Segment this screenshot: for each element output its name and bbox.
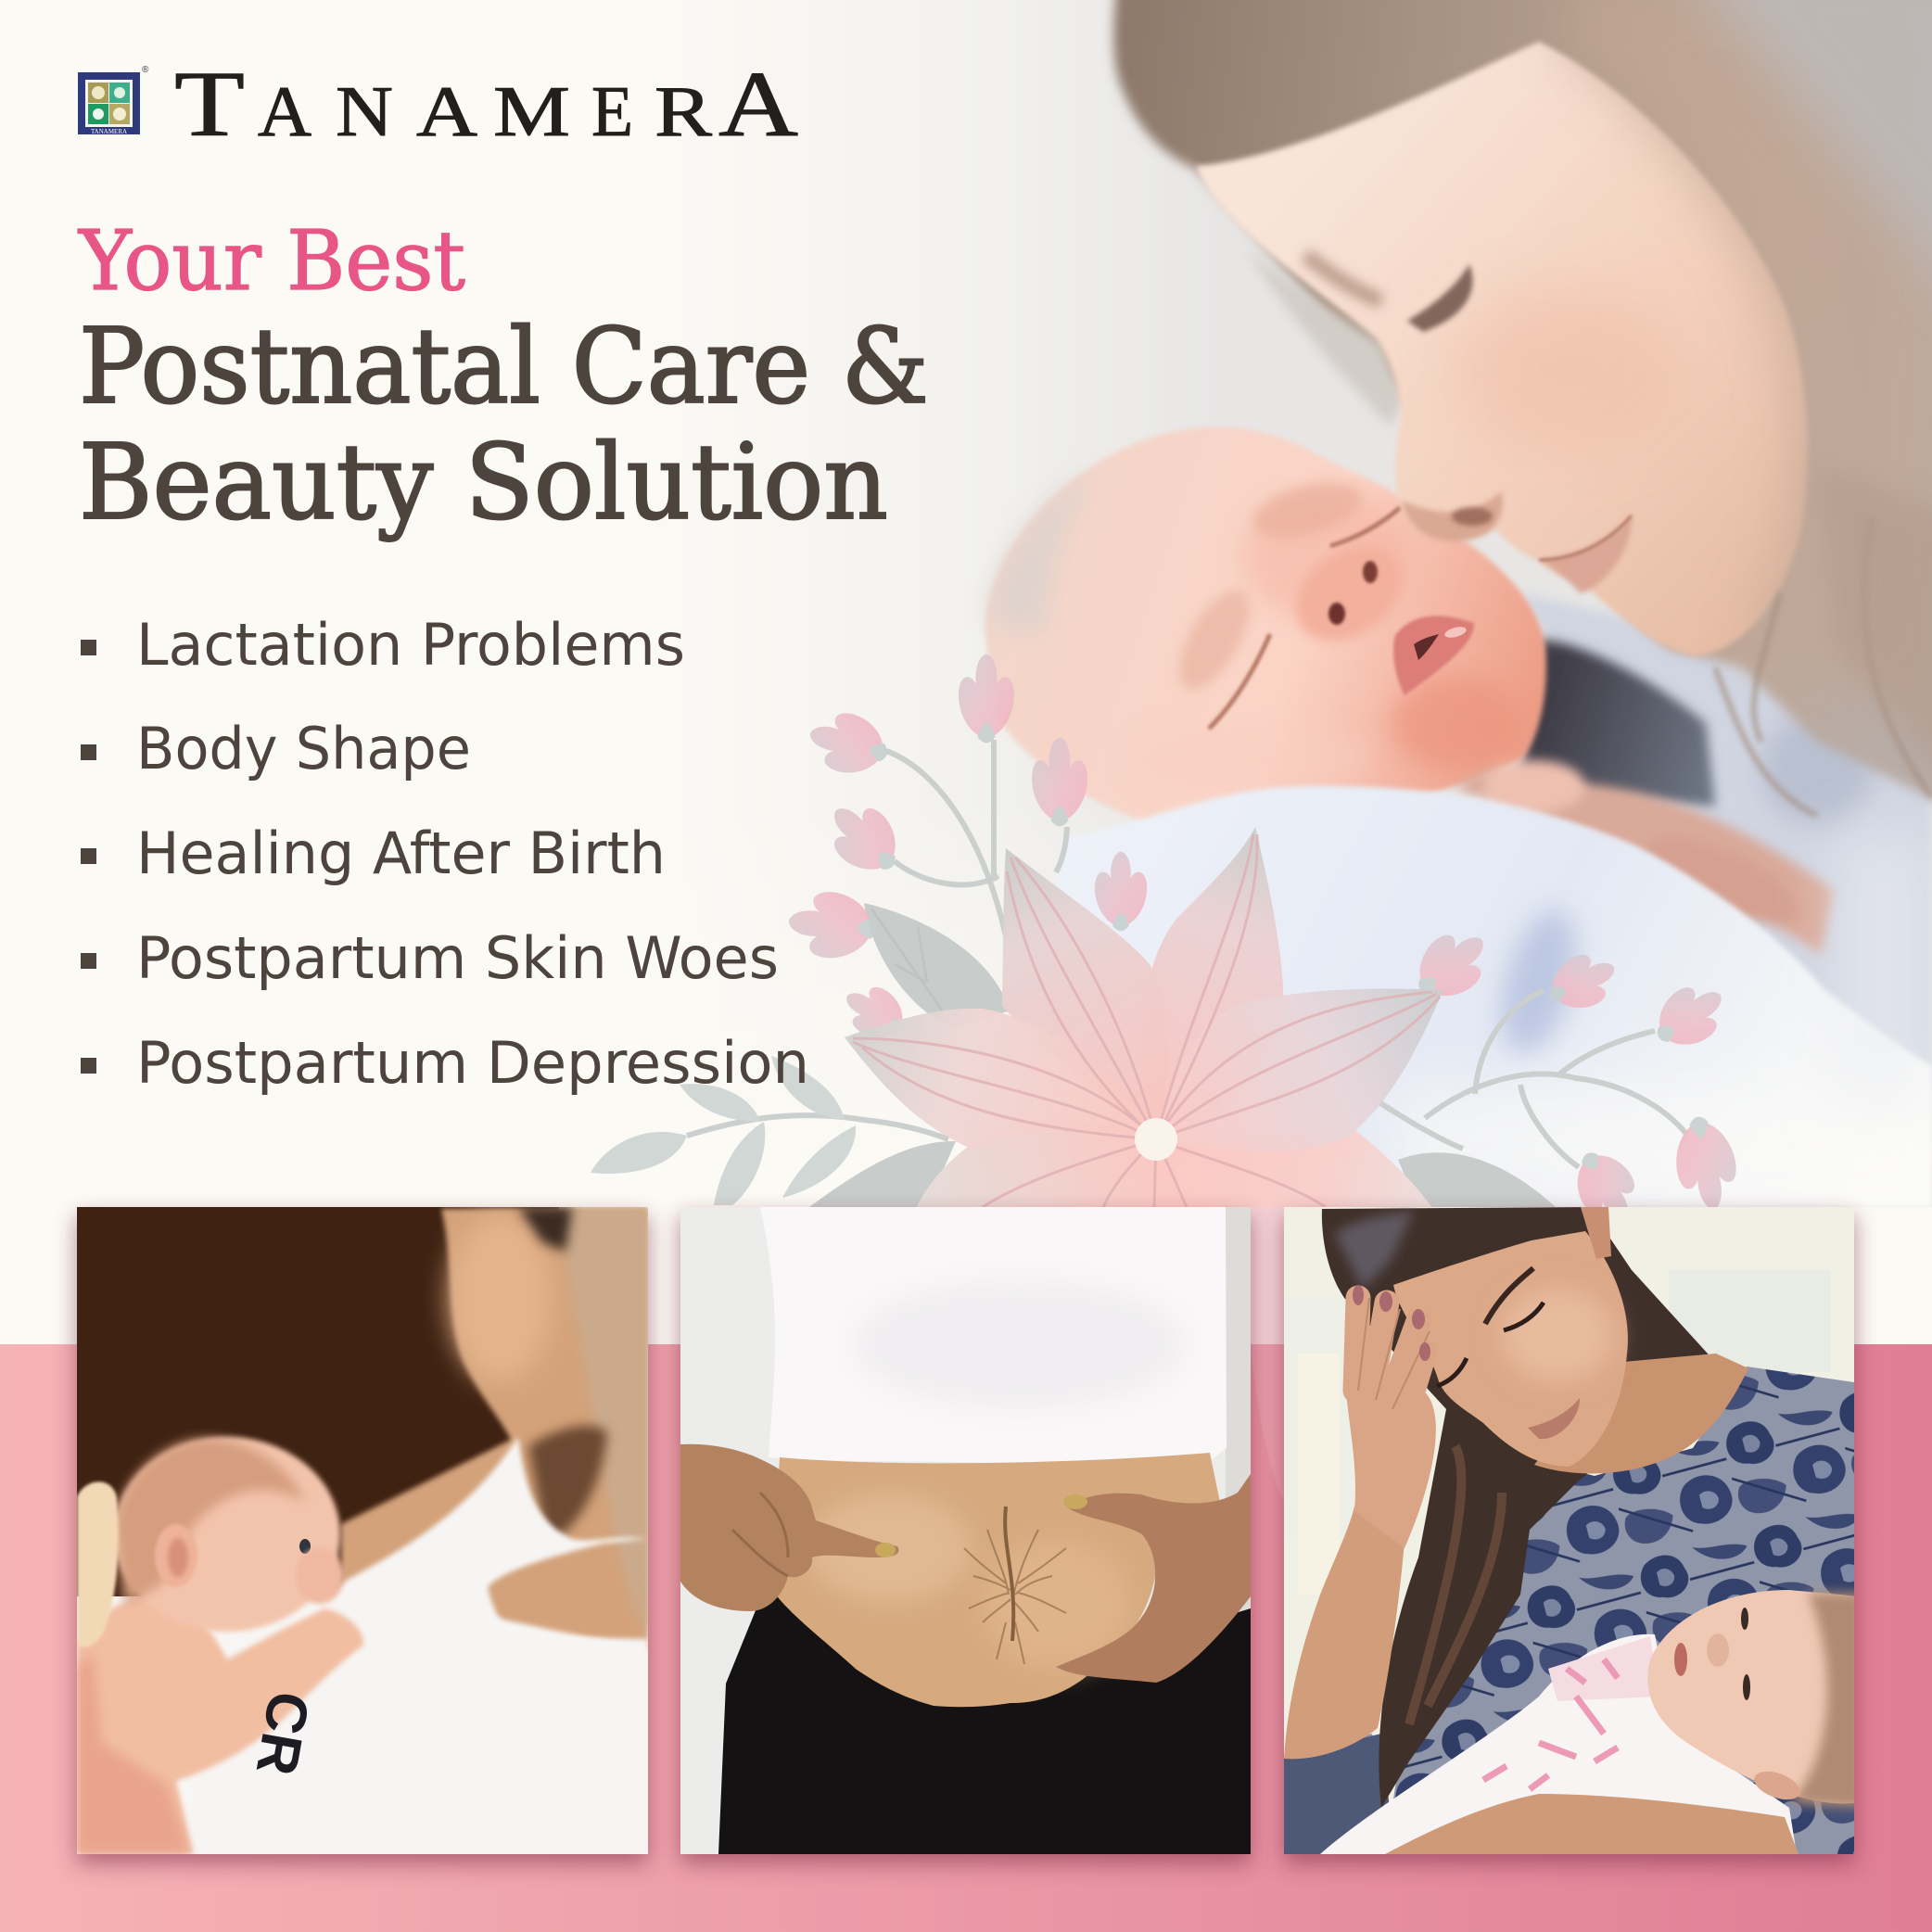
list item: Postpartum Depression: Postpartum Depression <box>136 1029 809 1097</box>
title line: Your Best: Your Best <box>78 212 465 309</box>
closed eyes <box>1504 1303 1544 1330</box>
nose shading <box>1402 491 1503 541</box>
flower petal: right <box>1156 989 1443 1151</box>
white top <box>188 1437 648 1854</box>
eyebrow <box>1305 255 1381 301</box>
mouth <box>1393 616 1474 695</box>
mother's hair <box>556 1207 648 1639</box>
supporting hand <box>77 1481 119 1647</box>
list item: Lactation Problems: Lactation Problems <box>136 611 685 679</box>
flower petal: upper right <box>1144 827 1283 1139</box>
logo wordmark: M <box>493 71 570 151</box>
logo icon: TANAMERA <box>91 128 127 135</box>
lips <box>1528 1398 1580 1439</box>
hand on forehead <box>1346 1285 1436 1548</box>
leaf veins <box>871 909 955 1029</box>
flower petal: left <box>845 1009 1156 1150</box>
photo shadows <box>77 1216 1854 1863</box>
title <box>78 212 929 543</box>
mother's hair <box>1113 0 1932 816</box>
logo wordmark: E <box>591 71 633 151</box>
title line: Postnatal Care &: Postnatal Care & <box>79 307 929 427</box>
logo wordmark: A <box>718 52 798 156</box>
baby's head <box>114 1437 340 1632</box>
hair highlight <box>1335 1211 1414 1289</box>
bullet list <box>81 611 809 1097</box>
flower buds <box>786 655 1743 1233</box>
logo icon <box>78 72 140 135</box>
faint lower petals between the photos <box>1251 1207 1284 1502</box>
mother's arm and neck <box>341 1207 648 1650</box>
baby's ear <box>1750 1766 1804 1805</box>
baby's eyes <box>1741 1608 1748 1630</box>
left hand pointing <box>680 1444 898 1611</box>
leaves <box>591 1056 856 1205</box>
black pants <box>718 1590 1251 1854</box>
lips <box>1539 515 1632 593</box>
newborn's head <box>985 427 1546 827</box>
eye <box>1407 264 1472 332</box>
title line: Beauty Solution: Beauty Solution <box>79 423 888 543</box>
flower petal: upper left <box>1002 848 1168 1139</box>
long hair strands <box>1715 519 1932 816</box>
dark hair <box>1322 1207 1716 1808</box>
closed eyes <box>1330 507 1401 546</box>
ear <box>1581 1207 1611 1259</box>
logo wordmark: R <box>655 71 713 151</box>
background <box>0 0 1932 1344</box>
petal veins <box>853 834 1440 1207</box>
mother's supporting arm <box>1385 1794 1799 1854</box>
list item: Body Shape: Body Shape <box>136 715 471 782</box>
mother's face <box>1196 0 1932 705</box>
white shirt <box>760 1207 1227 1465</box>
neck <box>1534 1354 1748 1473</box>
baby's nose <box>1707 1633 1729 1667</box>
baby's head <box>1647 1590 1854 1804</box>
pink band <box>0 1344 1932 1932</box>
photo: tired mother with baby <box>1284 1207 1863 1854</box>
shirt print: CR <box>244 1687 321 1780</box>
sweater <box>1520 593 1932 1094</box>
hero photo: mother and newborn <box>985 0 1932 1207</box>
belly <box>772 1453 1224 1707</box>
logo wordmark: A <box>416 71 477 151</box>
right hand <box>1056 1474 1251 1683</box>
logo wordmark: T <box>174 52 245 156</box>
forearm <box>1284 1506 1405 1759</box>
logo wordmark <box>174 52 798 156</box>
logo wordmark: N <box>336 71 393 151</box>
dark gap behind baby <box>1520 640 1715 807</box>
baby's hair <box>1789 1593 1863 1808</box>
patterned dress <box>1284 1366 1854 1854</box>
top right haze <box>1669 0 1932 352</box>
baby's hand <box>1455 760 1834 955</box>
face <box>1393 1231 1628 1467</box>
baby's body <box>77 1587 363 1854</box>
baby's mouth <box>1674 1643 1687 1676</box>
flower centre <box>1135 1118 1177 1161</box>
list item: Postpartum Skin Woes: Postpartum Skin Woes <box>136 924 779 992</box>
hair falling over the cheek <box>1555 6 1932 619</box>
registered mark: ® <box>142 65 149 75</box>
hair wisps behind the cheek <box>1253 258 1400 425</box>
photo: postpartum belly <box>680 1207 1251 1854</box>
list item: Healing After Birth: Healing After Birth <box>136 820 666 887</box>
blanket shadow <box>1488 903 1590 1062</box>
logo <box>78 52 798 156</box>
eyebrow <box>1485 1268 1533 1324</box>
logo wordmark: A <box>258 71 311 151</box>
nose <box>1294 547 1400 643</box>
blanket <box>1020 786 1932 1207</box>
photo: breastfeeding baby <box>77 1207 648 1854</box>
belly wrinkles <box>964 1506 1066 1664</box>
flower bottom petals <box>1150 1130 1437 1214</box>
baby's clothing <box>1320 1634 1797 1854</box>
floral illustration <box>591 655 1743 1233</box>
flower stems <box>687 740 1686 1167</box>
